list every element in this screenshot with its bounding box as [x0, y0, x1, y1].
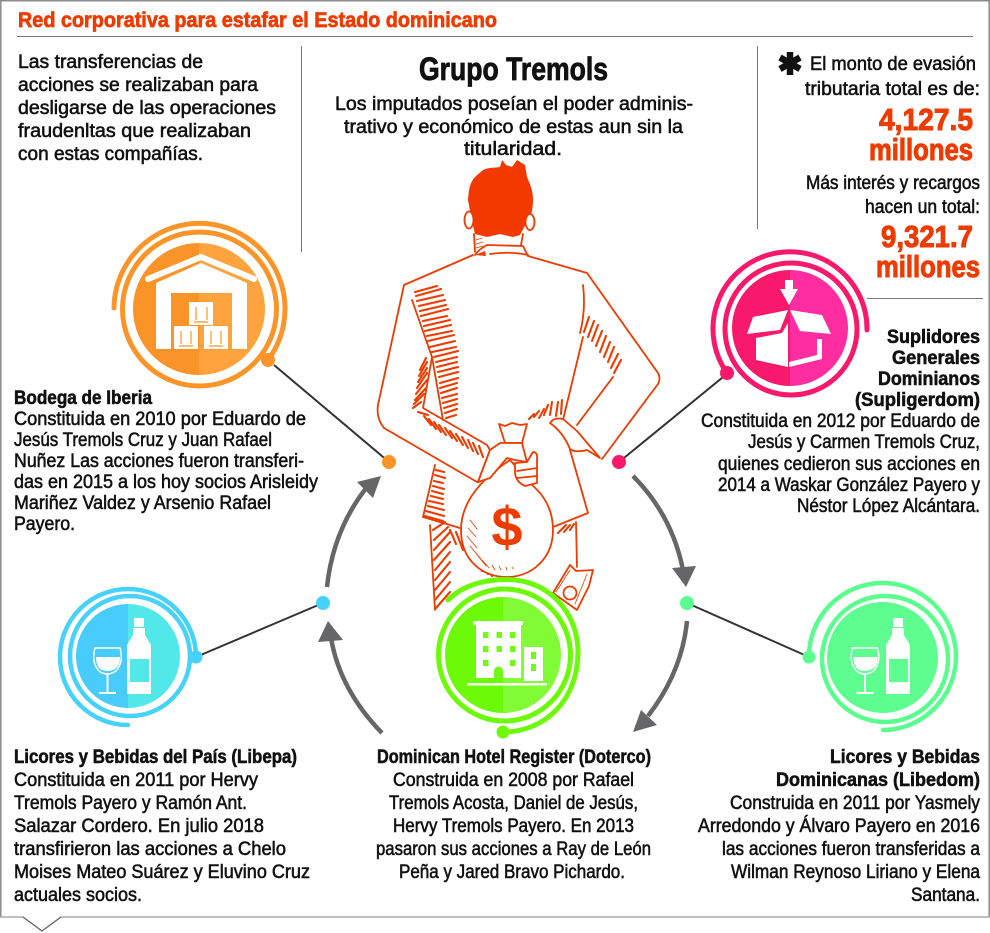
text block: Doterco: Dominican Hotel Register (Doterco)	[377, 747, 651, 768]
text block: Suplidores Generales Dominianos: (Supligerdom)	[855, 390, 980, 411]
text block: Suplidores Generales Dominianos: Suplidores	[887, 327, 980, 348]
text block: Bodega de Iberia: das en 2015 a los hoy socios Arisleidy	[14, 472, 318, 493]
footer notch	[0, 917, 990, 931]
text block: Libepa: actuales socios.	[14, 885, 142, 906]
icon: hotel building badge (green)	[430, 578, 582, 738]
text block: group description	[335, 94, 693, 160]
icon: asterisk	[780, 52, 800, 75]
text block: Doterco: Construida en 2008 por Rafael	[393, 770, 634, 791]
text block: Libedom: Dominicanas (Libedom)	[776, 770, 980, 791]
icon: wine badge (cyan)	[60, 589, 202, 725]
callout: evasion amounts: 4,127.5	[879, 102, 973, 137]
connector dot: mint	[680, 596, 694, 610]
text block: Bodega de Iberia	[14, 388, 318, 535]
text block: group description: titularidad.	[464, 139, 562, 160]
text block: Doterco: Peña y Jared Bravo Pichardo.	[399, 862, 625, 883]
text block: Libepa: transfirieron las acciones a Chelo	[14, 839, 286, 860]
text block: Suplidores Generales Dominianos: Generales	[892, 348, 980, 369]
arrow: mint to green	[633, 621, 687, 732]
text block: intro	[18, 52, 276, 165]
text block: intro: Las transferencias de	[18, 52, 203, 73]
text block: Suplidores Generales Dominianos	[701, 327, 980, 517]
callout: evasion amounts: hacen un total:	[865, 197, 980, 218]
text block: intro: desligarse de las operaciones	[18, 98, 276, 119]
connector dot: orange	[382, 455, 396, 469]
bank note	[553, 565, 593, 610]
text block: Libepa: Salazar Cordero. En julio 2018	[14, 816, 264, 837]
text block: Doterco: Hervy Tremols Payero. En 2013	[393, 816, 634, 837]
text block: Bodega de Iberia: Nuñez Las acciones fueron transferi-	[14, 451, 304, 472]
title: Red corporativa para estafar el Estado dominicano	[18, 9, 497, 32]
text block: Bodega de Iberia: Jesús Tremols Cruz y Juan Rafael	[14, 430, 272, 451]
text block: Libepa: Tremols Payero y Ramón Ant.	[14, 793, 247, 814]
text block: Doterco	[376, 747, 651, 883]
arrow: cyan to orange	[327, 476, 381, 587]
icon: open box badge (pink)	[713, 252, 867, 395]
connector dot: cyan	[316, 596, 330, 610]
connector dot: pink	[612, 455, 626, 469]
text block: Libepa: Moises Mateo Suárez y Eluvino Cruz	[14, 862, 310, 883]
arrow: green to cyan	[318, 621, 382, 733]
text block: Doterco: Tremols Acosta, Daniel de Jesús,	[389, 793, 638, 814]
text block: intro: con estas compañías.	[18, 144, 203, 165]
text block: Libedom: Santana.	[911, 885, 980, 906]
text block: Libedom: Licores y Bebidas	[830, 747, 980, 768]
callout: evasion amounts: tributaria total es de:	[805, 79, 980, 100]
text block: Bodega de Iberia: Payero.	[14, 514, 75, 535]
callout: evasion amounts: 9,321.7	[881, 219, 973, 254]
text block: intro: fraudenltas que realizaban	[18, 121, 251, 142]
heading: Grupo Tremols: Grupo Tremols	[419, 51, 608, 87]
text block: group description: trativo y económico de estas aun sin la	[344, 117, 683, 138]
text block: Libepa: Constituida en 2011 por Hervy	[14, 770, 258, 791]
text block: Bodega de Iberia: Mariñez Valdez y Arsenio Rafael	[14, 493, 271, 514]
callout: evasion amounts: El monto de evasión	[810, 54, 976, 75]
text block: intro: acciones se realizaban para	[18, 75, 258, 96]
illustration: man with money bag	[378, 160, 660, 610]
arrow: pink to mint	[633, 476, 696, 587]
text block: group description: Los imputados poseían el poder adminis-	[335, 94, 693, 115]
text block: Suplidores Generales Dominianos: Dominianos	[878, 369, 980, 390]
icon: warehouse badge (orange)	[114, 223, 285, 386]
text block: Libedom	[698, 747, 980, 906]
text block: Libepa: Licores y Bebidas del País (Libepa)	[14, 747, 297, 768]
text block: Bodega de Iberia: Constituida en 2010 por Eduardo de	[14, 409, 306, 430]
dollar sign: $	[491, 495, 523, 558]
text block: Libepa	[14, 747, 310, 906]
text block: Bodega de Iberia: Bodega de Iberia	[14, 388, 152, 409]
text block: Doterco: pasaron sus acciones a Ray de León	[376, 839, 651, 860]
callout: evasion amounts	[805, 54, 980, 284]
icon: wine badge (mint)	[802, 583, 956, 730]
